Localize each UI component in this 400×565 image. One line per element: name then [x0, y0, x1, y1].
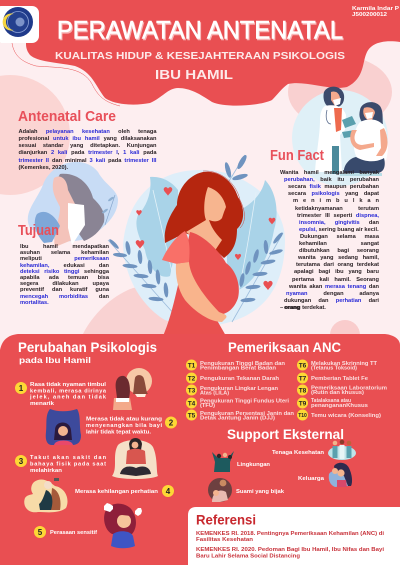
author: J500200012 [352, 12, 387, 18]
text block: Fun Fact: pertama kali hamil. Seorang [292, 276, 379, 282]
reference list [196, 531, 384, 560]
item T4: (TFU) [200, 403, 215, 409]
illustration: leaves behind central figure [136, 177, 277, 320]
item T6: (Tetanus Toksoid) [311, 366, 357, 372]
item T4: T4 [188, 400, 196, 407]
item T10: T10 [298, 413, 307, 419]
author [352, 6, 400, 18]
text block: Fun Fact: wanita akan merasa tenang dan [289, 284, 379, 290]
text block: Tujuan: segera dilakukan upaya [20, 281, 109, 287]
item T8: T8 [299, 387, 307, 394]
item T6: Melakukan Skrinning TT [311, 361, 378, 367]
text item 1: menarik [30, 401, 55, 407]
text block: Tujuan: preventif dan kuratif guna [20, 287, 109, 293]
text block: Fun Fact: Wanita hamil mengalami banyak [280, 170, 379, 176]
illustration: woman in pale blue blob [28, 162, 118, 247]
heading: Tujuan: Tujuan [18, 223, 59, 239]
subtitle: IBU HAMIL [155, 67, 233, 82]
text item 1: kembali, merasa dirinya [30, 388, 107, 394]
text block: Antenatal Care [18, 129, 157, 171]
background blob: pink top right [288, 56, 392, 128]
reference list: KEMENKES RI. 2018. Pentingnya Pemeriksaan Kehamilan (ANC) di [196, 531, 384, 537]
label: Keluarga: Keluarga [298, 476, 325, 482]
badge 1 [15, 382, 27, 394]
item T4: Pengukuran Tinggi Fundus Uteri [200, 398, 290, 404]
illustration: sensitive woman [104, 503, 142, 548]
badge 4: 4 [166, 487, 171, 496]
text item 3: bahaya fisik pada saat [30, 462, 106, 468]
reference list: KEMENKES RI. 2020. Pedoman Bagi Ibu Hamil, Ibu Nifas dan Bayi [196, 547, 384, 553]
icon: health workers [328, 440, 356, 460]
subtitle: KUALITAS HIDUP & KESEJAHTERAAN PSIKOLOGIS [55, 51, 345, 62]
text item 3: Takut akan sakit dan [30, 455, 107, 461]
text item 4: Merasa kehilangan perhatian [75, 489, 159, 495]
item T3: Pengukuran Lingkar Lengan [200, 386, 278, 392]
text block: Fun Fact: ketidaknyamanan terutam [295, 206, 379, 212]
item T8: Pemeriksaan Laboratorium [311, 386, 387, 392]
text item 2: lahir tidak tepat waktu. [86, 430, 151, 436]
item T10: Temu wicara (Konseling) [311, 413, 381, 419]
text block: Fun Fact: Dukungan selama masa [300, 234, 379, 240]
illustration: pregnant woman [162, 171, 244, 336]
item T10 [297, 410, 381, 420]
header banner [0, 0, 400, 106]
item T1: Penimbangan Berat Badan [200, 366, 276, 372]
text item 3: melahirkan [30, 468, 63, 474]
heading: Pemeriksaan ANC: Pemeriksaan ANC [228, 340, 341, 355]
text block: Tujuan: meliputi pemeriksaan [20, 256, 109, 262]
text item 3 [30, 455, 107, 474]
text block: Antenatal Care: sesuai standar yang ditetapkan. Kunjungan [18, 143, 156, 149]
badge 2 [165, 416, 177, 428]
subtitle [55, 51, 345, 82]
text block: Antenatal Care: (Kemenkes, 2020). [18, 165, 68, 171]
badge 3: 3 [19, 457, 24, 466]
reference list: Fasilitas Kesehatan [196, 537, 254, 543]
heading: Antenatal Care: Antenatal Care [18, 109, 116, 125]
label: Lingkungan: Lingkungan [237, 462, 271, 468]
text block: Fun Fact: nyaman dengan adanya [286, 291, 379, 297]
author: Karmila Indar P [352, 6, 400, 12]
text block: Fun Fact: wanita yang sedang hamil, [298, 255, 379, 261]
item T5: Detak Jantung Janin (DJJ) [200, 416, 275, 422]
item T5: T5 [188, 412, 196, 419]
badge 4 [162, 485, 174, 497]
item T2: T2 [188, 375, 196, 382]
item T1: T1 [188, 362, 196, 369]
text block: Tujuan: apabila ada temuan bisa [20, 275, 109, 281]
badge 2: 2 [169, 418, 174, 428]
illustration: person sitting with backpack [24, 478, 68, 512]
text block: Antenatal Care: profesional untuk ibu hamil yang dilaksanakan [18, 136, 156, 142]
text block: Tujuan: asuhan selama kehamilan [20, 250, 109, 256]
item T7: T7 [299, 375, 307, 382]
icon: husband and wife [208, 478, 232, 502]
illustration: anxious woman panel [46, 409, 81, 445]
text block: Fun Fact: kehamilan sangat [299, 241, 379, 247]
text block: Antenatal Care: trimester II dan minimal 3 kali pada trimester III [18, 158, 156, 164]
text block: Fun Fact: terutama dari orang terdekat [296, 262, 379, 268]
title: PERAWATAN ANTENATAL [58, 18, 344, 46]
background blob: pale blue behind central figure [123, 170, 285, 326]
label: Tenaga Kesehatan: Tenaga Kesehatan [272, 450, 325, 456]
text block: Fun Fact: m e n i m b u l k a n [293, 198, 379, 204]
text block: Fun Fact: perubahan, baik itu perubahan [284, 177, 379, 183]
illustration: blue branches [108, 154, 284, 322]
item T6: T6 [299, 362, 307, 369]
badge 1: 1 [19, 384, 24, 393]
item T9 [297, 398, 368, 409]
title: PERAWATAN ANTENATAL [57, 16, 343, 44]
text block: Fun Fact: epulsi, sering buang air kecil. [299, 227, 379, 233]
illustration: woman looking at mirror [113, 368, 152, 410]
text block: Fun Fact: trimester III seperti dispnea, [297, 213, 379, 219]
item T8 [297, 384, 387, 396]
illustration: sitting woman in hijab [112, 438, 158, 479]
item T1 [186, 360, 285, 372]
text item 1 [29, 382, 107, 407]
text block: Fun Fact: apalagi bagi ibu yang baru [294, 269, 379, 275]
item T3: T3 [188, 387, 196, 394]
item T1: Pengukuran Tinggi Badan dan [200, 361, 285, 367]
item T9: T9 [299, 400, 307, 407]
icon: community group [212, 451, 234, 472]
text block: Tujuan: Ibu hamil mendapatkan [20, 244, 109, 250]
text item 2: menyenangkan bila bayi [86, 423, 162, 429]
text item 1: Rasa tidak nyaman timbul [30, 382, 106, 388]
item T3: Atas (LILA) [200, 391, 229, 397]
bottom red section [0, 334, 400, 565]
item T7: Pemberian Tablet Fe [311, 376, 368, 382]
heading: Perubahan Psikologis [18, 339, 157, 365]
text block: Fun Fact: dukungan dan perhatian dari orang [284, 298, 379, 311]
item T5 [186, 410, 294, 422]
badge 3 [15, 455, 27, 467]
text item 1: jelek, aneh dan tidak [29, 395, 107, 401]
text block: Fun Fact: insomnia, gingivitis dan [299, 220, 379, 226]
text block: Tujuan: deteksi risiko tinggi sehingga [20, 269, 109, 275]
text block: Fun Fact: dibutuhkan bagi seorang [299, 248, 379, 254]
panel: Perubahan Psikologis [15, 339, 177, 548]
heading: Perubahan Psikologis: pada Ibu Hamil [19, 355, 91, 365]
text block: Fun Fact [280, 170, 380, 311]
illustration: doctor and patient [292, 87, 388, 186]
item T2: Pengukuran Tekanan Darah [200, 376, 279, 382]
icon: hearts [136, 187, 275, 290]
reference list: Baru Lahir Selama Social Distancing [196, 554, 301, 560]
item T6 [297, 360, 378, 372]
item T5: Pengukuran Persentasi Janin dan [200, 411, 294, 417]
text block: Fun Fact: secara psikologis yang dapat [288, 191, 379, 197]
text block: Fun Fact: – orang terdekat. [280, 305, 326, 311]
text item 2 [86, 416, 163, 436]
item T9: Tatalaksana atau [311, 398, 351, 404]
item T7 [297, 372, 368, 384]
item T9: penangananKhusus [311, 403, 368, 409]
logo [0, 6, 39, 43]
text item 2: Merasa tidak atau kurang [86, 416, 163, 422]
text block: Tujuan: mencegah morbiditas dan [20, 294, 109, 300]
text block: Tujuan: mortalitas. [20, 300, 49, 306]
text block: Tujuan [20, 244, 110, 306]
badge 5: 5 [38, 528, 43, 537]
text block: Tujuan: kehamilan, edukasi dan [20, 263, 109, 269]
pink mound bottom [82, 287, 360, 350]
label: Suami yang bijak: Suami yang bijak [236, 489, 285, 495]
heading: Fun Fact: Fun Fact [270, 148, 324, 164]
heading: Perubahan Psikologis: Perubahan Psikologis [18, 339, 157, 355]
heading: Support Eksternal: Support Eksternal [227, 426, 344, 442]
text block: Antenatal Care: Adalah pelayanan kesehatan oleh tenaga [18, 129, 156, 135]
badge 5 [34, 526, 46, 538]
panel: Referensi [188, 507, 400, 565]
item T3 [186, 384, 278, 397]
item T8: (Rutin dan khusus) [311, 390, 364, 396]
item T2 [186, 372, 279, 384]
icon: family [329, 463, 352, 487]
panel: Support Eksternal [208, 426, 356, 502]
text block: Fun Fact: secara fisik maupun perubahan [288, 184, 379, 190]
heading: Referensi: Referensi [196, 512, 256, 528]
item T4 [186, 398, 290, 409]
panel: Pemeriksaan ANC [186, 340, 387, 422]
background blob: pink top left [0, 75, 70, 195]
text block: Antenatal Care: dianjurkan 2 kali pada trimester I, 1 kali pada [18, 150, 157, 156]
text item 5: Perasaan sensitif [50, 530, 97, 536]
